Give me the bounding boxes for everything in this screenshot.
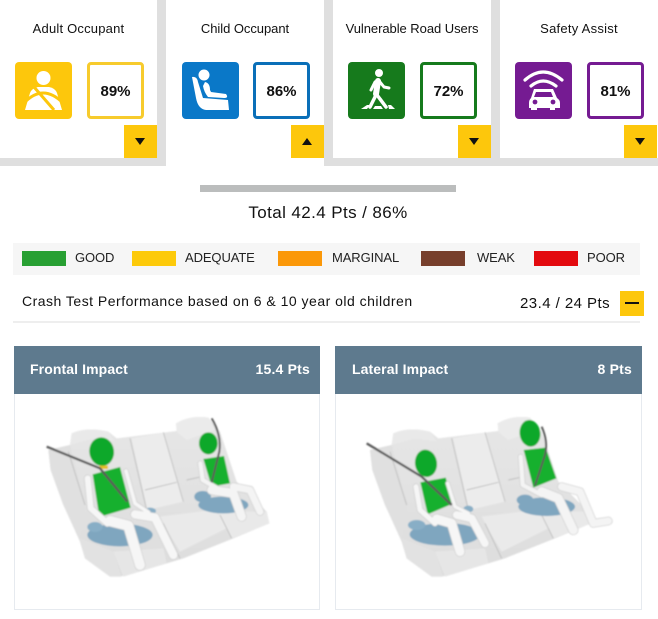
total score: Total 42.4 Pts / 86% [248, 203, 408, 222]
card: vulnerable road users [333, 0, 491, 158]
title: Adult Occupant [33, 21, 124, 36]
score 72%: 72% [433, 83, 464, 100]
score 81% [587, 62, 644, 119]
header: lateral impact: 8 Pts [598, 361, 632, 377]
card: safety assist [500, 0, 658, 158]
near child dummy [367, 443, 485, 552]
legend items: ADEQUATE [185, 250, 255, 265]
collapse button [620, 291, 644, 316]
legend items: WEAK [477, 250, 515, 265]
score 86%: 86% [266, 83, 297, 100]
icon: child seat [182, 62, 239, 119]
image frame [335, 394, 642, 610]
icon: seat belt occupant [15, 62, 72, 119]
icon: pedestrian [348, 62, 405, 119]
far child dummy [517, 419, 608, 530]
legend items: GOOD [75, 250, 114, 265]
score 81%: 81% [600, 83, 631, 100]
panel: lateral impact [335, 346, 642, 610]
far child dummy [194, 418, 260, 517]
header: frontal impact: 15.4 Pts [255, 361, 310, 377]
gray tab background [0, 0, 658, 166]
crash test heading: Crash Test Performance based on 6 & 10 year old children [22, 293, 413, 309]
header: frontal impact [14, 346, 320, 394]
panel: frontal impact [14, 346, 320, 610]
legend items: MARGINAL [332, 250, 399, 265]
toggle button [458, 125, 491, 158]
image: frontal impact seat with dummies [47, 417, 269, 577]
title: Vulnerable Road Users [346, 21, 478, 36]
header: frontal impact: Frontal Impact [30, 361, 128, 377]
legend items [22, 250, 625, 266]
divider [13, 321, 640, 323]
legend items: POOR [587, 250, 625, 265]
progress bar [200, 185, 456, 192]
header: lateral impact [335, 346, 642, 394]
toggle button [624, 125, 657, 158]
icon: car with sensor waves [515, 62, 572, 119]
legend [13, 243, 640, 275]
score 89% [87, 62, 144, 119]
score 89%: 89% [100, 83, 131, 100]
toggle button [291, 125, 324, 158]
card: child occupant [166, 0, 324, 166]
card: adult occupant [0, 0, 157, 158]
image frame [14, 394, 320, 610]
rear seat [370, 417, 591, 577]
score 86% [253, 62, 310, 119]
crash test points: 23.4 / 24 Pts [520, 295, 610, 312]
image: lateral impact seat with dummies [367, 417, 608, 577]
title: Safety Assist [540, 21, 618, 36]
toggle button [124, 125, 157, 158]
score 72% [420, 62, 477, 119]
rear seat [48, 417, 269, 577]
title: Child Occupant [201, 21, 289, 36]
near child dummy [47, 436, 173, 565]
header: lateral impact: Lateral Impact [352, 361, 448, 377]
